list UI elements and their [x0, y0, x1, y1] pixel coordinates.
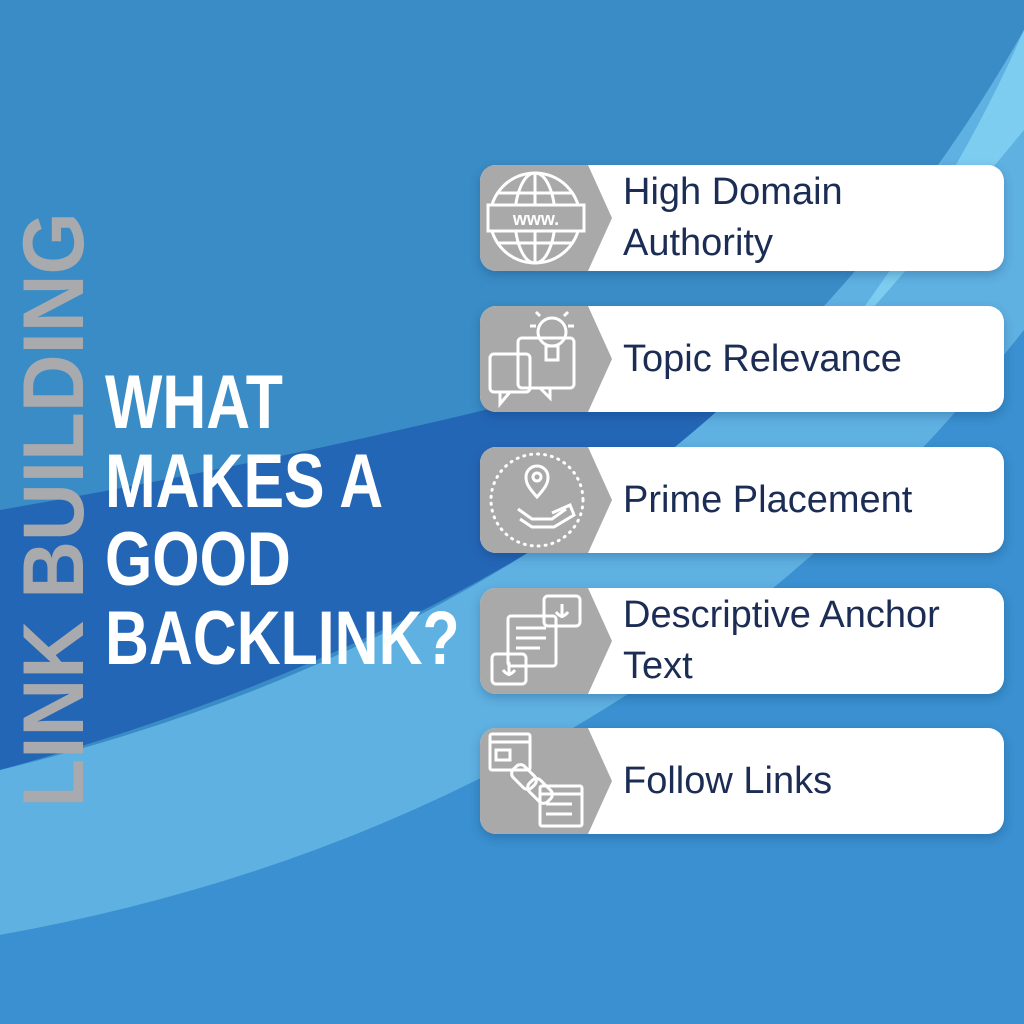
card: Prime Placement: Prime Placement — [623, 478, 912, 520]
vertical label: LINK BUILDING: LINK BUILDING — [6, 212, 102, 808]
card: Topic Relevance — [480, 306, 1004, 412]
card: Descriptive Anchor Text: Descriptive Anchor — [623, 594, 940, 636]
card: Topic Relevance: Topic Relevance — [623, 338, 902, 380]
card: Follow Links — [480, 728, 1004, 834]
icon: globe www: www. — [512, 209, 559, 229]
icon: globe www — [480, 165, 612, 271]
card: High Domain Authority: High Domain — [623, 171, 843, 213]
icon: chain link pages — [480, 728, 612, 834]
title: BACKLINK? — [105, 596, 460, 680]
card: High Domain Authority: Authority — [623, 222, 773, 264]
card: Follow Links: Follow Links — [623, 760, 832, 802]
card: Descriptive Anchor Text: Text — [623, 645, 693, 687]
card: Descriptive Anchor Text — [480, 588, 1004, 694]
icon: location hand — [480, 447, 612, 553]
icon: anchor documents — [480, 588, 612, 694]
title — [105, 360, 460, 680]
card: High Domain Authority — [480, 165, 1004, 271]
icon: lightbulb chat — [480, 306, 612, 412]
title: MAKES A — [105, 438, 383, 524]
card: Prime Placement — [480, 447, 1004, 553]
title: GOOD — [105, 517, 291, 602]
title: WHAT — [105, 360, 283, 445]
